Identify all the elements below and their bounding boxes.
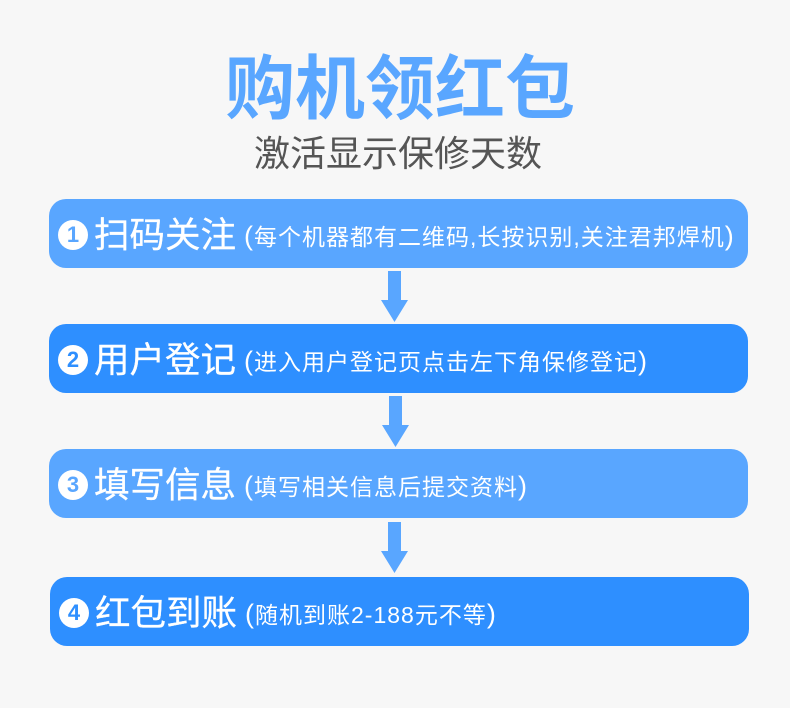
step 3 bar [49, 449, 748, 518]
step 1 number: 1 [67, 222, 79, 247]
step 1 heading: 扫码关注 [94, 215, 236, 255]
arrow 3 [381, 522, 408, 573]
step 3 heading: 填写信息 [94, 465, 236, 505]
step 3 number: 3 [67, 472, 79, 497]
step 4 number: 4 [68, 600, 80, 625]
step 4 heading: 红包到账 [95, 593, 237, 633]
step 2 number: 2 [67, 347, 79, 372]
step 2 bar [49, 324, 748, 393]
step 2 number [58, 345, 88, 375]
title: 购机领红包 [225, 50, 575, 128]
step 1 number [58, 220, 88, 250]
step 2 heading: 用户登记 [94, 340, 236, 380]
arrow 1 [381, 271, 408, 322]
step 4 number [59, 598, 89, 628]
step 2 note: (进入用户登记页点击左下角保修登记) [244, 346, 648, 376]
step 3 note: (填写相关信息后提交资料) [244, 471, 528, 501]
subtitle: 激活显示保修天数 [254, 133, 542, 174]
step 3 number [58, 470, 88, 500]
step 1 note: (每个机器都有二维码,长按识别,关注君邦焊机) [244, 221, 735, 251]
step 4 bar [50, 577, 749, 646]
step 1 bar [49, 199, 748, 268]
step 4 note: (随机到账2-188元不等) [245, 599, 497, 629]
arrow 2 [382, 396, 409, 447]
